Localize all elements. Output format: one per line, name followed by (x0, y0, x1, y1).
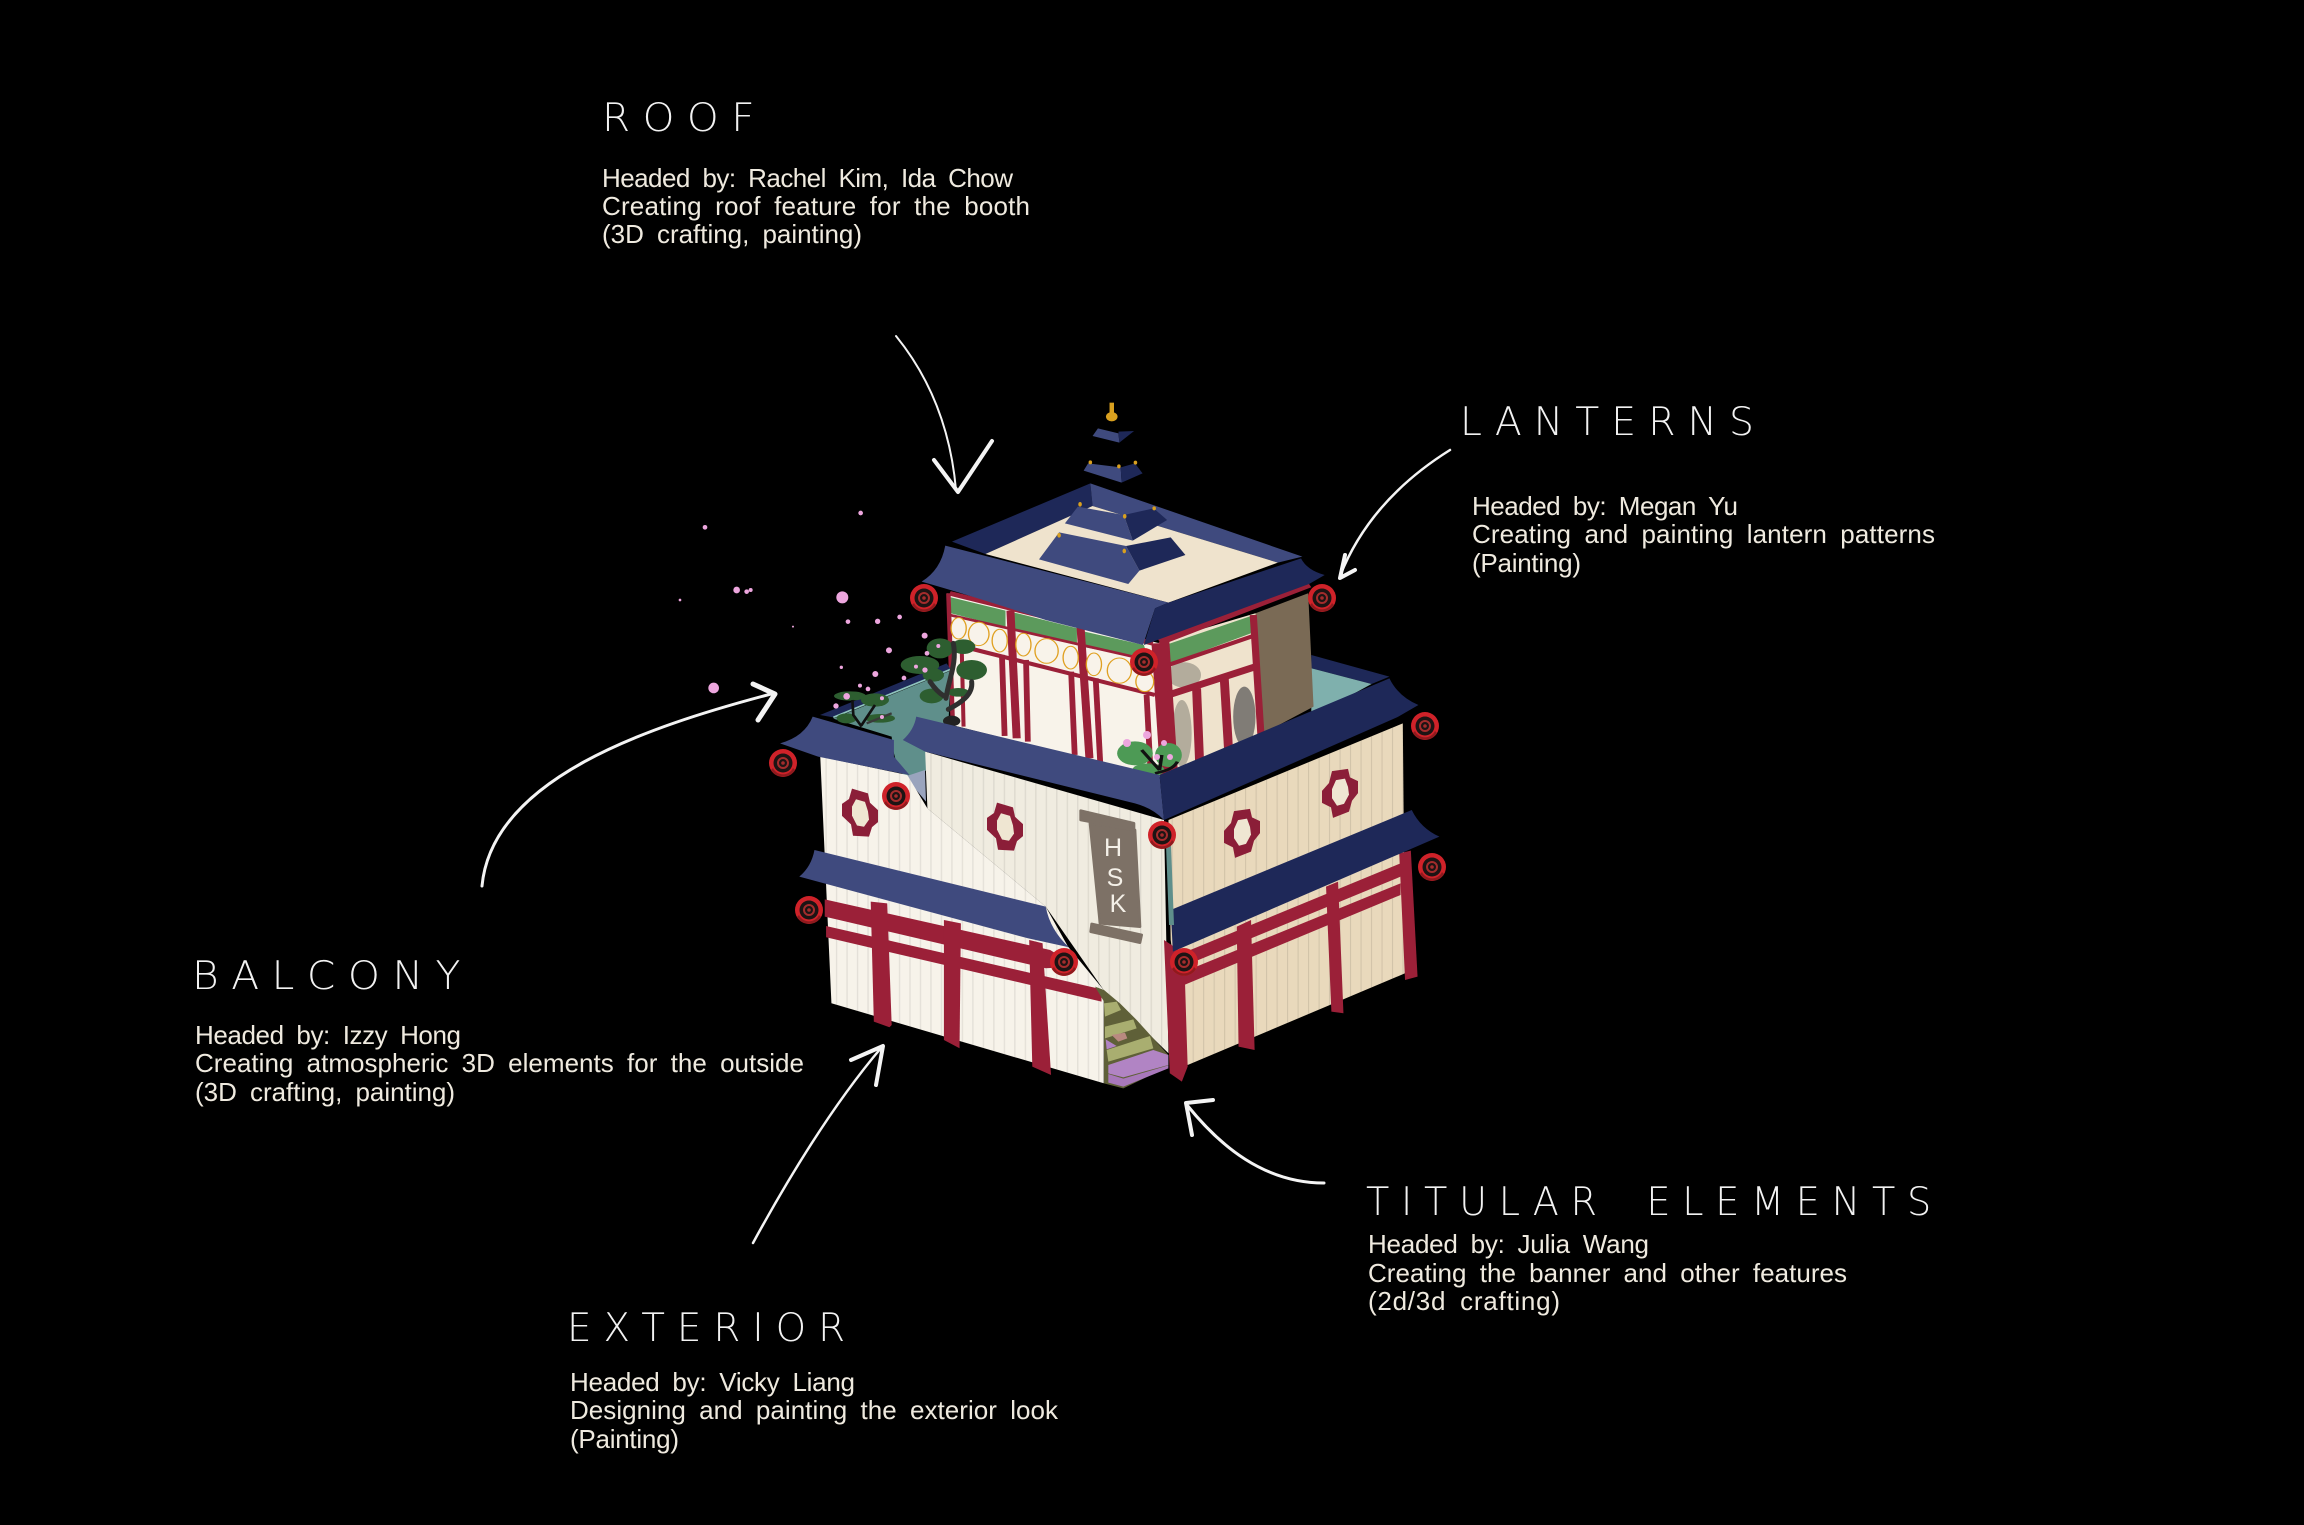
pine tree large (901, 638, 987, 726)
banner lettering: K (1110, 890, 1127, 918)
pagoda finial tiers (1039, 403, 1185, 584)
banner scroll (1081, 811, 1142, 943)
lower right eave (1171, 810, 1439, 952)
arrow: lanterns (1340, 450, 1450, 578)
window ornaments (842, 764, 1358, 861)
label: exterior: Headed by: Vicky Liang (570, 1367, 855, 1397)
label: exterior: EXTERIOR (567, 1306, 857, 1351)
stairs (1095, 987, 1168, 1088)
balcony floor (820, 663, 951, 802)
roof back (952, 483, 1302, 603)
roof eaves (922, 546, 1325, 645)
brown panel (1256, 593, 1314, 734)
arrow: exterior (753, 1046, 883, 1243)
shrub on balcony (1117, 741, 1182, 777)
label: balcony: Creating atmospheric 3D elements for the outside (195, 1048, 804, 1078)
banner lettering: H (1104, 834, 1122, 862)
second floor eaves (780, 678, 1418, 820)
label: exterior (567, 1306, 1059, 1454)
label: titular elements: Headed by: Julia Wang (1368, 1229, 1649, 1259)
label: balcony (192, 954, 804, 1107)
middle wall (925, 752, 1168, 1053)
cherry blossom petals (679, 511, 1173, 760)
label: lanterns: Headed by: Megan Yu (1472, 491, 1738, 521)
upper wall left (947, 593, 1165, 778)
label: exterior: (Painting) (570, 1424, 679, 1454)
right balcony (1311, 655, 1389, 717)
label: balcony: (3D crafting, painting) (195, 1077, 455, 1107)
upper wall right (1160, 584, 1309, 778)
right wall (1168, 723, 1405, 1065)
ground red frame left (825, 899, 1101, 1075)
arrow: titular elements (1186, 1100, 1324, 1183)
label: balcony: Headed by: Izzy Hong (195, 1020, 461, 1050)
label: balcony: BALCONY (192, 954, 473, 999)
label: lanterns: LANTERNS (1460, 400, 1766, 445)
label: titular elements: Creating the banner and other features (1368, 1258, 1847, 1288)
label: roof: ROOF (602, 96, 767, 141)
label: titular elements: (2d/3d crafting) (1368, 1286, 1560, 1316)
left balcony with trees (820, 638, 987, 802)
label: roof: Creating roof feature for the booth (602, 191, 1030, 221)
lanterns (769, 584, 1446, 976)
label: titular elements (1366, 1180, 1943, 1316)
ground red frame right (1164, 851, 1418, 1082)
lower left eave (799, 850, 1069, 947)
label: lanterns (1460, 400, 1935, 578)
pine tree small (834, 691, 895, 727)
arrow: roof (896, 336, 992, 492)
label: exterior: Designing and painting the exterior look (570, 1395, 1059, 1425)
arrow: balcony (482, 684, 775, 886)
label: lanterns: (Painting) (1472, 548, 1581, 578)
lower storeys (780, 678, 1439, 1083)
label: roof: (3D crafting, painting) (602, 219, 862, 249)
label: roof (602, 96, 1030, 249)
label: titular elements: TITULAR ELEMENTS (1366, 1180, 1943, 1225)
banner lettering: S (1107, 864, 1123, 892)
label: lanterns: Creating and painting lantern patterns (1472, 519, 1935, 549)
corner teal strip (1166, 845, 1174, 925)
upper storey and roof (922, 403, 1389, 778)
left wall (820, 757, 1104, 1083)
label: roof: Headed by: Rachel Kim, Ida Chow (602, 163, 1013, 193)
banner lettering (1104, 834, 1127, 918)
building (679, 403, 1446, 1088)
